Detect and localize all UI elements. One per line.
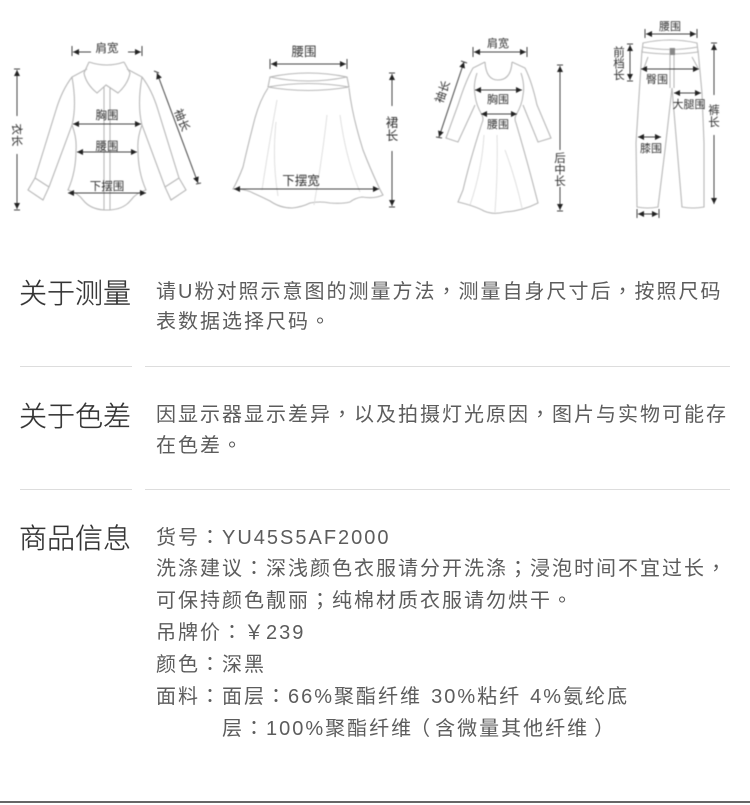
text: product information: 吊牌价：￥239	[156, 616, 305, 645]
text: product information: 洗涤建议：深浅颜色衣服请分开洗涤；浸泡时间不宜过长，	[156, 552, 728, 581]
shirt labels: 胸围	[96, 107, 118, 123]
dress labels: 长	[554, 173, 566, 189]
text: product information: 面料：面层：66%聚酯纤维 30%粘纤 4%氨纶底	[156, 680, 629, 709]
text: about color difference: 在色差。	[156, 429, 244, 458]
skirt labels: 长	[386, 125, 399, 144]
shirt labels: 腰围	[96, 138, 118, 154]
shirt labels: 袖长	[170, 106, 194, 134]
shirt outline	[28, 62, 186, 210]
trousers labels: 腰围	[659, 18, 681, 34]
heading: about measuring: 关于测量	[19, 272, 131, 312]
text: about measuring: 表数据选择尺码。	[156, 305, 332, 334]
dress labels: 袖长	[431, 78, 454, 105]
skirt labels: 裙	[386, 112, 399, 131]
dress outline	[446, 62, 551, 213]
text: about color difference: 因显示器显示差异，以及拍摄灯光原因，图片与实物可能存	[156, 398, 728, 427]
dress folds	[470, 135, 522, 212]
trousers labels: 档	[613, 56, 625, 72]
heading: product information: 商品信息	[19, 517, 131, 557]
trousers labels: 裤	[708, 102, 720, 118]
trousers labels: 前	[613, 44, 625, 60]
bottom rule	[0, 801, 750, 803]
shirt labels: 下摆围	[90, 178, 124, 194]
dress measurement arrows	[436, 47, 563, 211]
text: about measuring: 请U粉对照示意图的测量方法，测量自身尺寸后，按照尺码	[156, 275, 722, 304]
dress labels: 后	[554, 150, 566, 166]
trousers measurement arrows	[627, 29, 717, 218]
shirt labels: 肩宽	[96, 40, 119, 56]
shirt labels	[9, 40, 194, 194]
trousers labels: 大腿围	[672, 96, 706, 112]
diagram: trousers	[613, 18, 720, 218]
trousers outline	[636, 40, 704, 208]
diagram: skirt	[233, 41, 399, 208]
text: about color difference	[156, 398, 728, 458]
text: about measuring	[156, 275, 722, 334]
text: product information	[156, 521, 728, 741]
diagram: dress	[431, 35, 566, 213]
skirt folds	[262, 100, 360, 205]
text: product information: 层：100%聚酯纤维（含微量其他纤维）	[222, 712, 616, 741]
diagram: shirt	[9, 40, 201, 210]
skirt measurement arrows	[270, 59, 395, 207]
trousers waist tab	[670, 48, 675, 55]
garment measurement diagrams	[9, 18, 720, 219]
dress labels: 胸围	[487, 91, 509, 107]
dress labels: 中	[554, 162, 566, 178]
dress labels: 腰围	[487, 116, 509, 132]
shirt labels: 衣长	[9, 124, 25, 147]
trousers labels: 臀围	[646, 71, 668, 87]
shirt measurement arrows	[14, 46, 201, 210]
skirt outline	[233, 73, 383, 208]
trousers labels: 长	[613, 67, 625, 83]
text: product information: 货号：YU45S5AF2000	[156, 521, 391, 550]
trousers labels: 长	[708, 114, 720, 130]
skirt labels	[282, 41, 399, 189]
heading: about color difference: 关于色差	[19, 395, 131, 435]
text: product information: 颜色：深黑	[156, 648, 266, 677]
skirt labels: 下摆宽	[282, 170, 320, 189]
trousers labels	[613, 18, 720, 156]
skirt labels: 腰围	[291, 41, 317, 60]
trousers labels: 膝围	[640, 140, 662, 156]
dress labels	[431, 35, 566, 189]
text: product information: 可保持颜色靓丽；纯棉材质衣服请勿烘干。	[156, 584, 574, 613]
dress labels: 肩宽	[487, 35, 509, 51]
